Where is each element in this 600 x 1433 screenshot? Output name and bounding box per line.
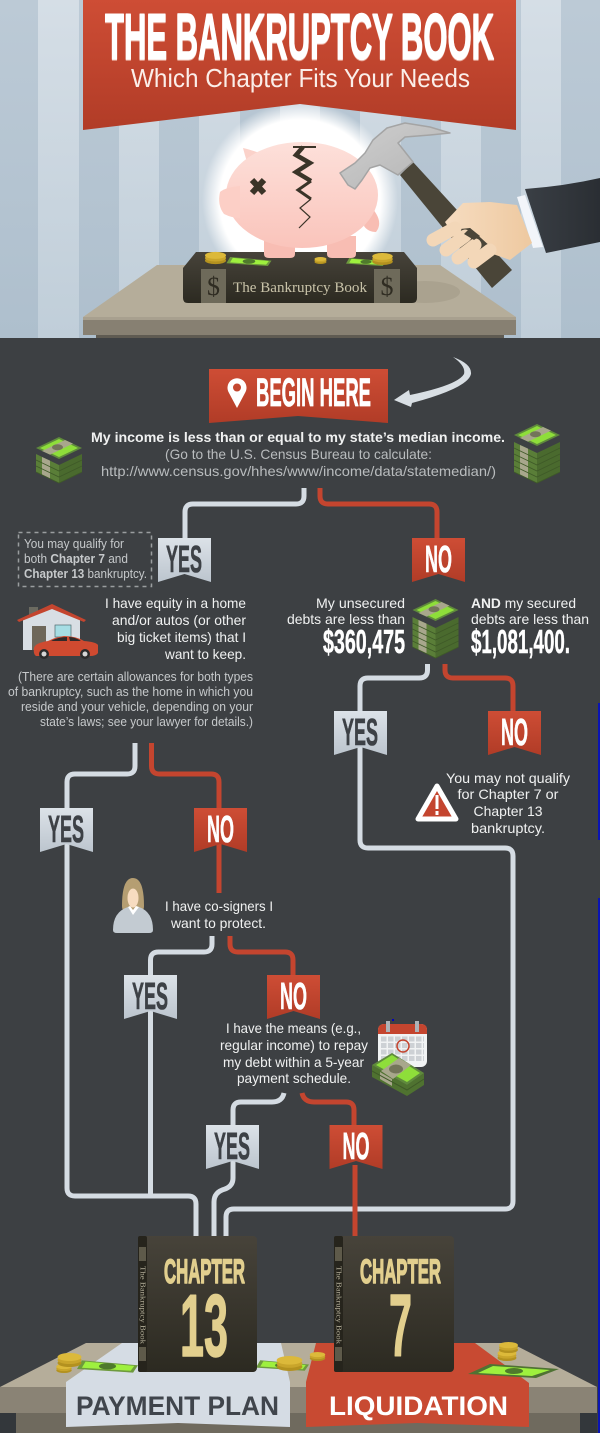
repayment question (220, 1020, 368, 1086)
shirt cuff (517, 195, 543, 248)
coins and bills on bottom table (56, 1342, 559, 1378)
icon: money stack left (36, 437, 82, 483)
median income question: (Go to the U.S. Census Bureau to calculate: (165, 446, 432, 462)
not qualified text (446, 770, 570, 836)
co-signers question (165, 898, 273, 931)
callout: qualify for both chapters (18, 532, 152, 586)
icon: calendar (378, 1019, 427, 1067)
secured debts (471, 595, 589, 660)
book: chapter 7: 7 (389, 1276, 412, 1375)
yes flag 1 (158, 538, 211, 582)
icon: map pin (228, 378, 247, 408)
yes flag 4: YES (132, 976, 168, 1018)
allowances note: reside and your vehicle, depending on your (21, 699, 254, 714)
hand holding hammer (433, 202, 532, 262)
glow behind piggy bank (202, 102, 398, 298)
repayment question: payment schedule. (237, 1070, 351, 1086)
title banner (83, 0, 516, 130)
payment plan ribbon: PAYMENT PLAN (76, 1391, 279, 1421)
begin here banner: BEGIN HERE (256, 371, 371, 415)
icon: money stack right (514, 424, 560, 483)
payment plan ribbon (66, 1343, 290, 1427)
icon: woman co-signer (113, 878, 153, 933)
yes flag 3: YES (48, 809, 84, 851)
equity question (105, 595, 246, 662)
equity question: I have equity in a home (105, 595, 246, 611)
secured debts: AND my secured (471, 595, 576, 611)
liquidation ribbon (306, 1343, 529, 1427)
not qualified text: You may not qualify (446, 770, 570, 786)
yes flag 5 (206, 1125, 259, 1169)
piggy bank, cracked (219, 142, 379, 258)
bottom table (0, 1343, 597, 1433)
callout: qualify for both chapters: You may qualify for (24, 536, 125, 551)
median income question: http://www.census.gov/hhes/www/income/data/statemedian/) (101, 463, 496, 479)
allowances note: of bankruptcy, such as the home in which you (8, 684, 253, 699)
no flag 3 (194, 808, 247, 852)
flow connector lines (67, 488, 513, 1238)
no flag 3: NO (207, 809, 234, 851)
unsecured debts: debts are less than (287, 611, 405, 627)
book: chapter 13: CHAPTER (164, 1253, 245, 1291)
book: chapter 13: 13 (180, 1276, 228, 1375)
money and coins on book (205, 252, 393, 266)
begin here banner (209, 369, 388, 423)
yes flag 2 (334, 711, 387, 755)
subtitle: Which Chapter Fits Your Needs (131, 63, 470, 93)
allowances note (8, 669, 254, 729)
repayment question: I have the means (e.g., (226, 1020, 361, 1036)
hammer (340, 123, 512, 288)
icon: warning triangle (418, 786, 456, 819)
co-signers question: want to protect. (170, 915, 266, 931)
not qualified text: Chapter 13 (474, 803, 543, 819)
callout: qualify for both chapters: Chapter 13 bankruptcy. (24, 566, 147, 581)
curved arrow to begin here (394, 357, 471, 407)
dark flowchart background (0, 338, 600, 1433)
no flag 5 (330, 1125, 382, 1169)
repayment question: my debt within a 5-year (223, 1054, 364, 1070)
book: The Bankruptcy Book: $ (207, 272, 220, 301)
not qualified text: for Chapter 7 or (458, 786, 559, 802)
allowances note: state’s laws; see your lawyer for details.) (40, 714, 253, 729)
suit sleeve (525, 178, 600, 253)
book: The Bankruptcy Book (183, 252, 417, 303)
median income question: My income is less than or equal to my state’s median income. (91, 429, 505, 445)
yes flag 4 (124, 975, 177, 1019)
yes flag 5: YES (214, 1126, 250, 1168)
book: The Bankruptcy Book: The Bankruptcy Book (233, 280, 367, 296)
book: The Bankruptcy Book: $ (380, 272, 394, 301)
unsecured debts: My unsecured (316, 595, 405, 611)
table in hero (83, 265, 516, 338)
allowances note: (There are certain allowances for both types (18, 669, 253, 684)
no flag 1 (412, 538, 465, 582)
liquidation ribbon: LIQUIDATION (329, 1391, 508, 1421)
yes flag 2: YES (342, 712, 378, 754)
secured debts: debts are less than (471, 611, 589, 627)
book: chapter 13: The Bankruptcy Book (138, 1266, 146, 1345)
not qualified text: bankruptcy. (471, 820, 545, 836)
no flag 5: NO (342, 1126, 370, 1168)
book: chapter 7: CHAPTER (360, 1253, 441, 1291)
book: chapter 13 (138, 1236, 257, 1375)
book: chapter 7: The Bankruptcy Book (334, 1266, 342, 1345)
yes flag 1: YES (166, 539, 202, 581)
book: chapter 7 (334, 1236, 454, 1375)
median income question (91, 429, 505, 479)
co-signers question: I have co-signers I (165, 898, 273, 914)
repayment question: regular income) to repay (220, 1037, 368, 1053)
unsecured debts: $360,475 (323, 623, 405, 660)
equity question: and/or autos (or other (112, 612, 246, 628)
hero background: striped wall (0, 0, 600, 338)
no flag 4 (267, 975, 320, 1019)
icon: house and car (17, 604, 98, 659)
unsecured debts (287, 595, 405, 660)
equity question: big ticket items) that I (117, 629, 246, 645)
yes flag 3 (40, 808, 93, 852)
no flag 1: NO (425, 539, 452, 581)
no flag 4: NO (280, 976, 307, 1018)
right edge blue line (598, 703, 600, 1433)
no flag 2 (488, 711, 541, 755)
callout: qualify for both chapters: both Chapter 7 and (24, 551, 128, 566)
icon: money stack middle (412, 599, 458, 658)
icon: money bundle (372, 1053, 424, 1096)
no flag 2: NO (501, 712, 528, 754)
equity question: want to keep. (164, 646, 246, 662)
